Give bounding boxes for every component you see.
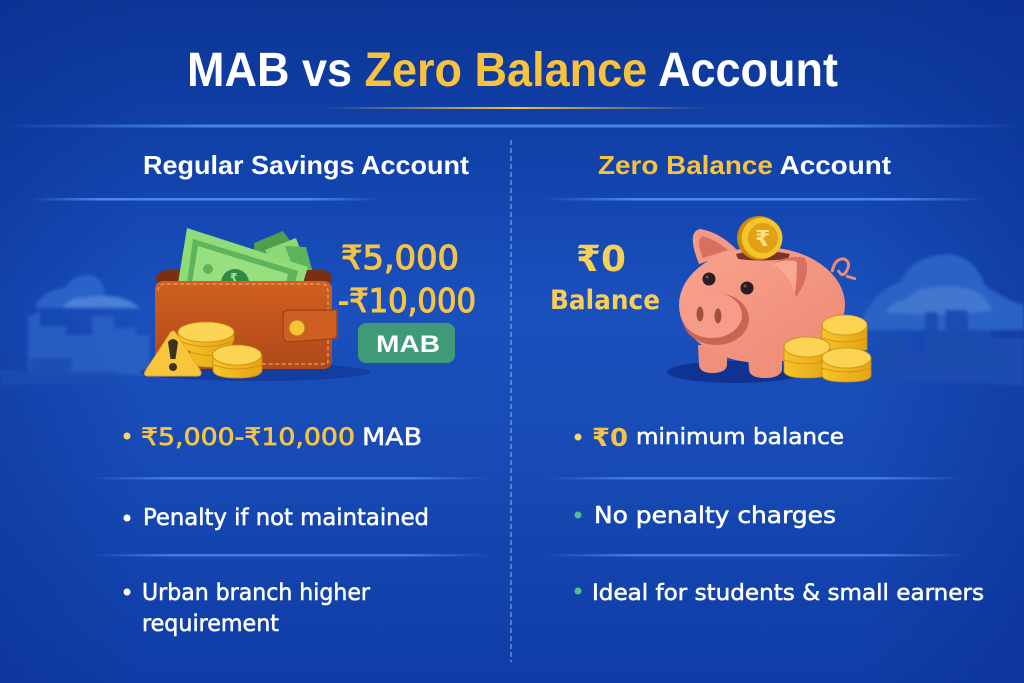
skyline right bbox=[862, 254, 1024, 385]
point: urban branch: Urban branch higher bbox=[142, 580, 371, 606]
title: MAB vs Zero Balance Account bbox=[187, 44, 838, 97]
snout bbox=[683, 293, 749, 345]
point: zero minimum balance: minimum balance bbox=[636, 425, 844, 450]
point: urban branch: requirement bbox=[142, 611, 279, 637]
badge: MAB: MAB bbox=[376, 331, 440, 358]
amount: zero balance: Balance bbox=[550, 285, 660, 316]
list: zero balance points bbox=[545, 423, 984, 606]
point: MAB amount: ₹5,000-₹10,000 bbox=[141, 423, 355, 451]
point: ideal users: Ideal for students & small earners bbox=[592, 581, 984, 606]
point: urban branch bbox=[124, 580, 371, 637]
point: no penalty: No penalty charges bbox=[594, 503, 836, 529]
badge: MAB bbox=[358, 323, 455, 363]
coin bbox=[737, 216, 782, 260]
clasp bbox=[283, 310, 337, 342]
coin stacks bbox=[784, 315, 871, 382]
right ear bbox=[772, 257, 807, 297]
tail bbox=[832, 259, 856, 279]
point: zero minimum balance bbox=[574, 423, 844, 452]
panel: regular savings account bbox=[30, 150, 490, 637]
coin stack bbox=[178, 322, 262, 378]
legs bbox=[698, 345, 727, 373]
list: regular savings points bbox=[90, 423, 490, 637]
icon: wallet with cash, coins and warning bbox=[140, 228, 370, 381]
wallet body bbox=[155, 281, 332, 369]
amount: zero balance: ₹0 bbox=[576, 239, 626, 280]
left ear bbox=[693, 229, 738, 264]
heading: zero balance: Zero Balance Account bbox=[598, 150, 891, 180]
centre divider bbox=[510, 140, 512, 662]
skyline left bbox=[0, 275, 150, 385]
point: zero minimum balance: ₹0 bbox=[592, 423, 628, 452]
slot bbox=[736, 251, 790, 260]
eyes bbox=[702, 272, 754, 294]
amount: zero balance bbox=[550, 239, 660, 316]
point: MAB amount: MAB bbox=[362, 423, 422, 451]
point: MAB amount bbox=[124, 423, 422, 451]
point: penalty: Penalty if not maintained bbox=[143, 505, 429, 531]
icon: wallet with cash, coins and warning: ₹ bbox=[230, 271, 238, 284]
amount: MAB range bbox=[338, 238, 476, 320]
back notes bbox=[254, 231, 305, 281]
warning triangle bbox=[145, 331, 201, 376]
amount: MAB range: ₹5,000 bbox=[341, 238, 459, 277]
body bbox=[679, 247, 845, 363]
amount: MAB range: -₹10,000 bbox=[338, 281, 476, 320]
front note bbox=[178, 228, 308, 283]
icon: piggy bank with coins bbox=[667, 216, 871, 383]
title underline bbox=[320, 107, 712, 109]
heading: regular savings: Regular Savings Account bbox=[143, 150, 469, 180]
header divider bbox=[0, 124, 1024, 128]
coin: ₹ bbox=[755, 227, 770, 252]
panel: zero balance account bbox=[545, 150, 985, 606]
